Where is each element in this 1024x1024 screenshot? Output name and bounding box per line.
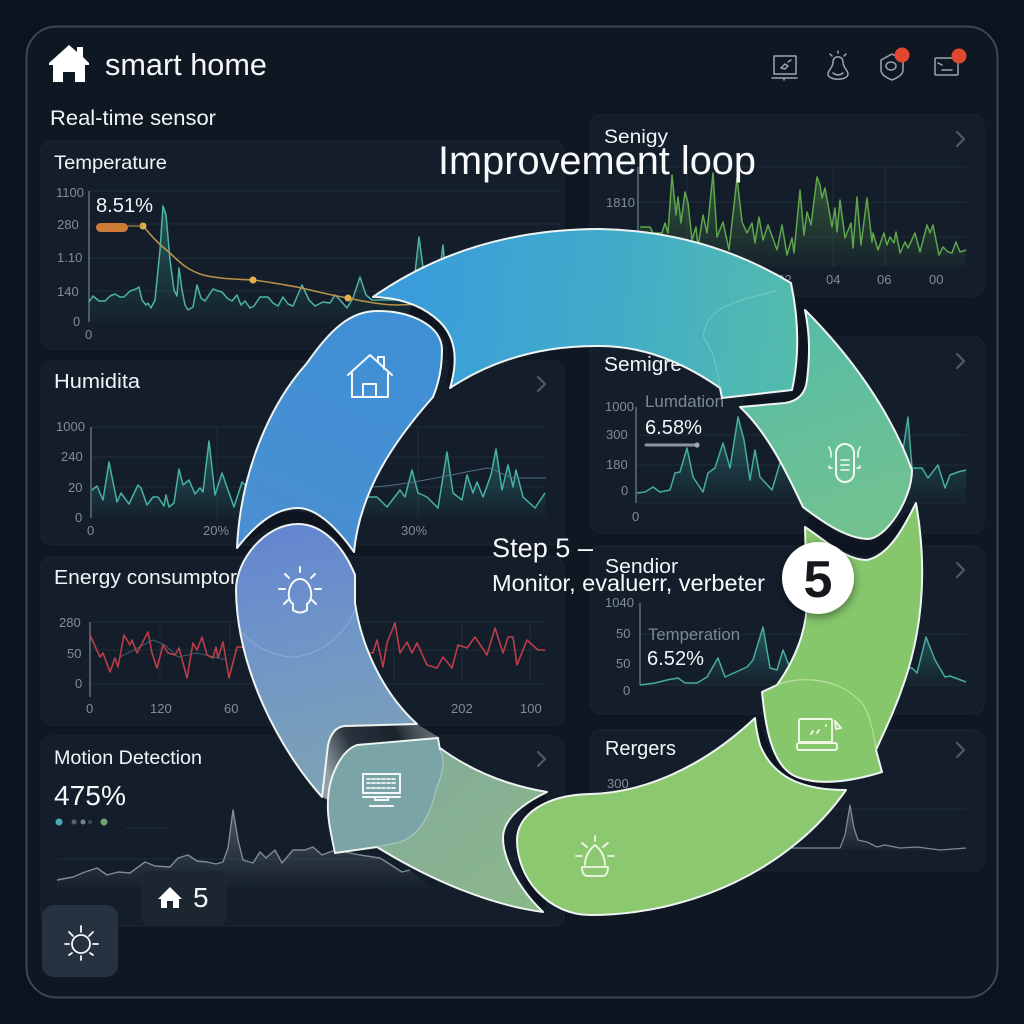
- area chart: [637, 417, 966, 503]
- axis labels: 1100: [56, 185, 84, 200]
- segment 5: bright green: [517, 718, 846, 915]
- badge: step indicator: [141, 871, 227, 926]
- axis labels: 102: [770, 272, 792, 287]
- axis labels: 30%: [401, 523, 427, 538]
- trend line: [370, 468, 546, 487]
- panel: rergers sensor: [590, 730, 984, 871]
- icon: keyboard monitor: [363, 774, 400, 806]
- heading: temperature: Temperature: [54, 152, 167, 174]
- value: 6.52%: [647, 648, 704, 670]
- diagram title: Improvement loop: [438, 139, 756, 183]
- chevron: [957, 563, 964, 577]
- panel: motion detection: [41, 736, 564, 926]
- slider: [646, 442, 700, 448]
- fold highlight: [704, 290, 777, 388]
- chevron: [538, 377, 545, 391]
- axis labels: 0: [621, 483, 628, 498]
- heading: motion: Motion Detection: [54, 748, 202, 769]
- step number badge: [782, 542, 854, 614]
- axis labels: [56, 419, 427, 538]
- chevron: [957, 354, 964, 368]
- axis labels: 240: [61, 449, 83, 464]
- icon: sun: [65, 926, 98, 960]
- axis labels: 50: [67, 646, 81, 661]
- segment 7: periwinkle: [236, 524, 417, 797]
- alert dot: shield: [894, 48, 910, 62]
- panel: temperature: [41, 141, 564, 349]
- segment 6: sage green: [328, 738, 547, 912]
- area chart: [92, 441, 546, 518]
- axis labels: [59, 615, 542, 716]
- axis labels: 06: [877, 272, 891, 287]
- icon: terminal: [935, 58, 958, 75]
- trend line: [120, 640, 227, 660]
- segment 3: teal green: [740, 310, 912, 539]
- panel: humidity: [41, 361, 564, 545]
- panel: luminance sensor: [590, 337, 984, 533]
- axis labels: 50: [616, 656, 630, 671]
- progress pill: [96, 223, 143, 232]
- axis labels: 50: [616, 626, 630, 641]
- step caption: [492, 533, 765, 596]
- area chart: [787, 805, 966, 851]
- icon: small house: [158, 887, 182, 908]
- axis labels: 1.10: [57, 250, 82, 265]
- trend line: [143, 226, 423, 305]
- icon: home outline: [348, 355, 392, 397]
- axis labels: [605, 399, 639, 524]
- axis labels: [606, 195, 943, 287]
- trend markers: [140, 222, 352, 302]
- area chart: [640, 173, 966, 267]
- improvement loop diagram: [236, 229, 922, 915]
- axis labels: 1810: [606, 195, 635, 210]
- alert dot: terminal: [952, 48, 966, 64]
- icon: laptop: [797, 719, 841, 750]
- line chart: [90, 623, 545, 678]
- axis labels: 1040: [605, 595, 634, 610]
- axis labels: 0: [75, 676, 82, 691]
- area chart: [89, 206, 460, 322]
- area chart: [57, 810, 430, 888]
- axis labels: 1000: [605, 399, 634, 414]
- caption detail: Monitor, evaluerr, verbeter: [492, 570, 765, 596]
- area chart: [640, 627, 966, 685]
- heading: Senigy: [604, 127, 669, 148]
- brand name: smart home: [105, 48, 267, 82]
- sub label: Lumdation: [645, 393, 724, 411]
- axis labels: 0: [632, 509, 639, 524]
- axis labels: 20: [68, 480, 82, 495]
- section heading: Real-time sensor: [50, 106, 216, 130]
- panel: temperature sensor: [590, 546, 984, 714]
- value: 8.51%: [96, 195, 153, 217]
- axis labels: 180: [606, 457, 628, 472]
- axis labels: 0: [86, 701, 93, 716]
- axis labels: 0: [85, 327, 92, 342]
- step number: 5: [804, 551, 832, 609]
- icon: alarm light: [576, 836, 614, 876]
- legend dots: [56, 818, 108, 826]
- heading: energy: Energy consumptor: [54, 567, 237, 589]
- axis labels: 0: [75, 510, 82, 525]
- axis labels: 0: [623, 683, 630, 698]
- axis labels: 300: [606, 427, 628, 442]
- axis labels: 140: [57, 284, 79, 299]
- segment: wedge shadow: [322, 724, 440, 800]
- value: 6.58%: [645, 417, 702, 439]
- glow arc: [240, 610, 355, 657]
- axis labels: 0: [73, 314, 80, 329]
- axis labels: 280: [57, 217, 79, 232]
- icon: bulb: [828, 51, 848, 79]
- chevron: [538, 752, 545, 766]
- axis label: 300: [607, 776, 629, 791]
- tab outline: [777, 680, 876, 750]
- segment 4: green with laptop tab: [762, 503, 922, 782]
- icon: house: [49, 45, 89, 82]
- axis labels: 100: [520, 701, 542, 716]
- axis labels: [56, 185, 92, 342]
- axis labels: 0: [87, 523, 94, 538]
- heading: Sendior: [605, 556, 678, 578]
- icon: shield: [881, 54, 903, 80]
- axis labels: 1000: [56, 419, 85, 434]
- axis labels: 60: [224, 701, 238, 716]
- axis labels: 280: [59, 615, 81, 630]
- header: brand: [49, 45, 267, 82]
- icon: monitor: [772, 56, 797, 80]
- badge number: 5: [193, 882, 209, 913]
- icon: light bulb: [279, 567, 321, 612]
- value: 475%: [54, 780, 126, 811]
- header: status icons: [772, 48, 966, 80]
- axis labels: 20%: [203, 523, 229, 538]
- chevron: [957, 132, 964, 146]
- keyboard tab: [328, 738, 443, 853]
- icon: sensor capsule: [829, 444, 860, 482]
- button: sun: [42, 905, 118, 977]
- axis labels: 04: [826, 272, 840, 287]
- axis labels: [605, 595, 634, 698]
- panel: energy consumption: [41, 557, 564, 725]
- gap shadows: [246, 312, 908, 902]
- axis labels: 120: [150, 701, 172, 716]
- heading: Rergers: [605, 738, 676, 760]
- panel: energy sensor top right: [590, 115, 984, 296]
- chevron: [957, 743, 964, 757]
- heading: Semigre: [604, 354, 682, 376]
- segment 1: blue (home): [237, 311, 442, 552]
- heading: humidity: Humidita: [54, 371, 141, 393]
- axis labels: 00: [929, 272, 943, 287]
- axis labels: 202: [451, 701, 473, 716]
- step caption: Step 5 –: [492, 533, 593, 563]
- sub label: Temperation: [648, 626, 740, 644]
- segment 2: cyan arc: [373, 229, 797, 398]
